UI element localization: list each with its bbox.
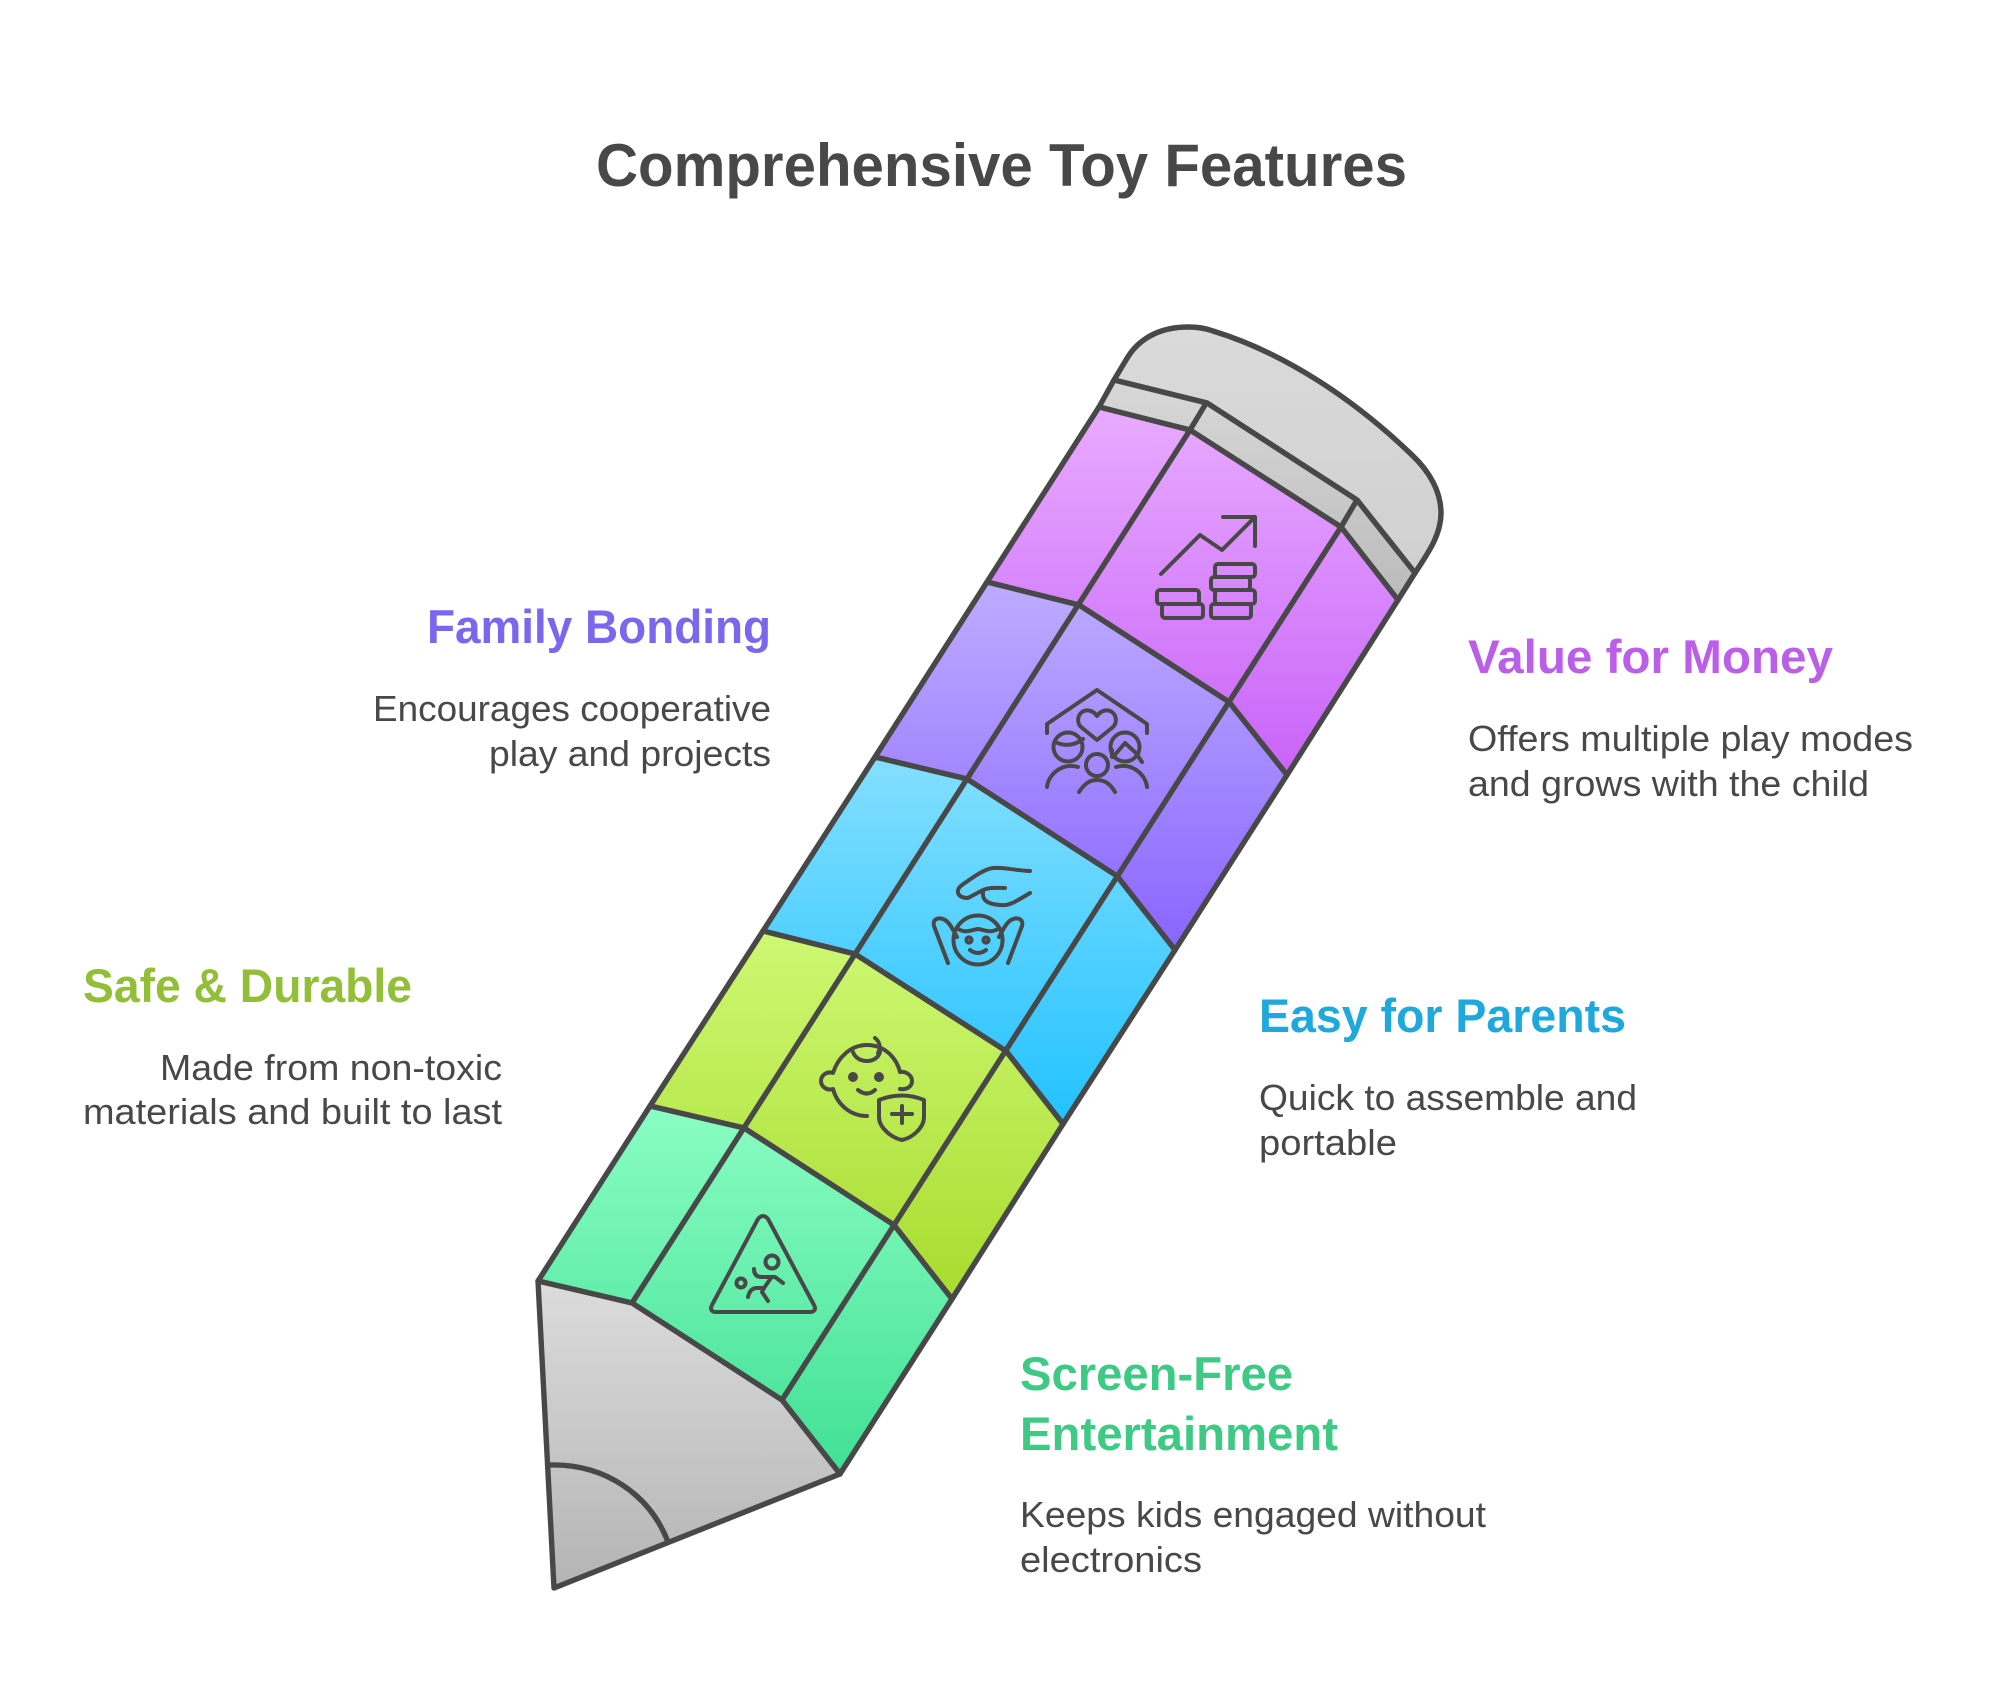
label: easy for parents: portable	[1259, 1122, 1397, 1163]
label: safe and durable: materials and built to last	[83, 1091, 502, 1132]
segment column lines	[632, 430, 1341, 1400]
label: family bonding: Family Bonding	[427, 600, 771, 653]
label: screen-free entertainment: Screen-Free	[1020, 1347, 1293, 1400]
label: family bonding	[373, 600, 771, 774]
label: screen-free entertainment: Keeps kids engaged without	[1020, 1494, 1486, 1535]
icon: running child warning triangle	[711, 1216, 815, 1312]
label: family bonding: Encourages cooperative	[373, 688, 771, 729]
segment: safe and durable	[650, 931, 1063, 1299]
segment: value for money	[987, 407, 1398, 775]
segment: screen-free entertainment	[538, 1106, 952, 1474]
label: value for money: Offers multiple play modes	[1468, 718, 1913, 759]
label: value for money: and grows with the child	[1468, 763, 1869, 804]
label: safe and durable: Safe & Durable	[83, 959, 412, 1012]
pencil eraser cap	[1099, 327, 1441, 600]
icon: baby face with shield	[821, 1038, 924, 1140]
segment: easy for parents	[763, 757, 1175, 1124]
label: easy for parents	[1259, 989, 1637, 1163]
label: value for money	[1468, 630, 1913, 804]
label: screen-free entertainment: Entertainment	[1020, 1407, 1338, 1460]
label: family bonding: play and projects	[489, 733, 771, 774]
label: value for money: Value for Money	[1468, 630, 1833, 683]
pencil illustration	[538, 327, 1441, 1588]
icon: growth chart and coins	[1157, 517, 1255, 618]
label: safe and durable	[83, 959, 502, 1132]
icon: family under a roof	[1047, 690, 1147, 792]
label: screen-free entertainment: electronics	[1020, 1539, 1202, 1580]
segment: family bonding	[875, 582, 1287, 950]
icon: hand over child	[934, 868, 1030, 964]
label: easy for parents: Easy for Parents	[1259, 989, 1626, 1042]
label: screen-free entertainment	[1020, 1347, 1486, 1580]
pencil tip	[538, 1281, 840, 1588]
title: Comprehensive Toy Features	[596, 132, 1407, 199]
label: safe and durable: Made from non-toxic	[160, 1047, 502, 1088]
label: easy for parents: Quick to assemble and	[1259, 1077, 1637, 1118]
